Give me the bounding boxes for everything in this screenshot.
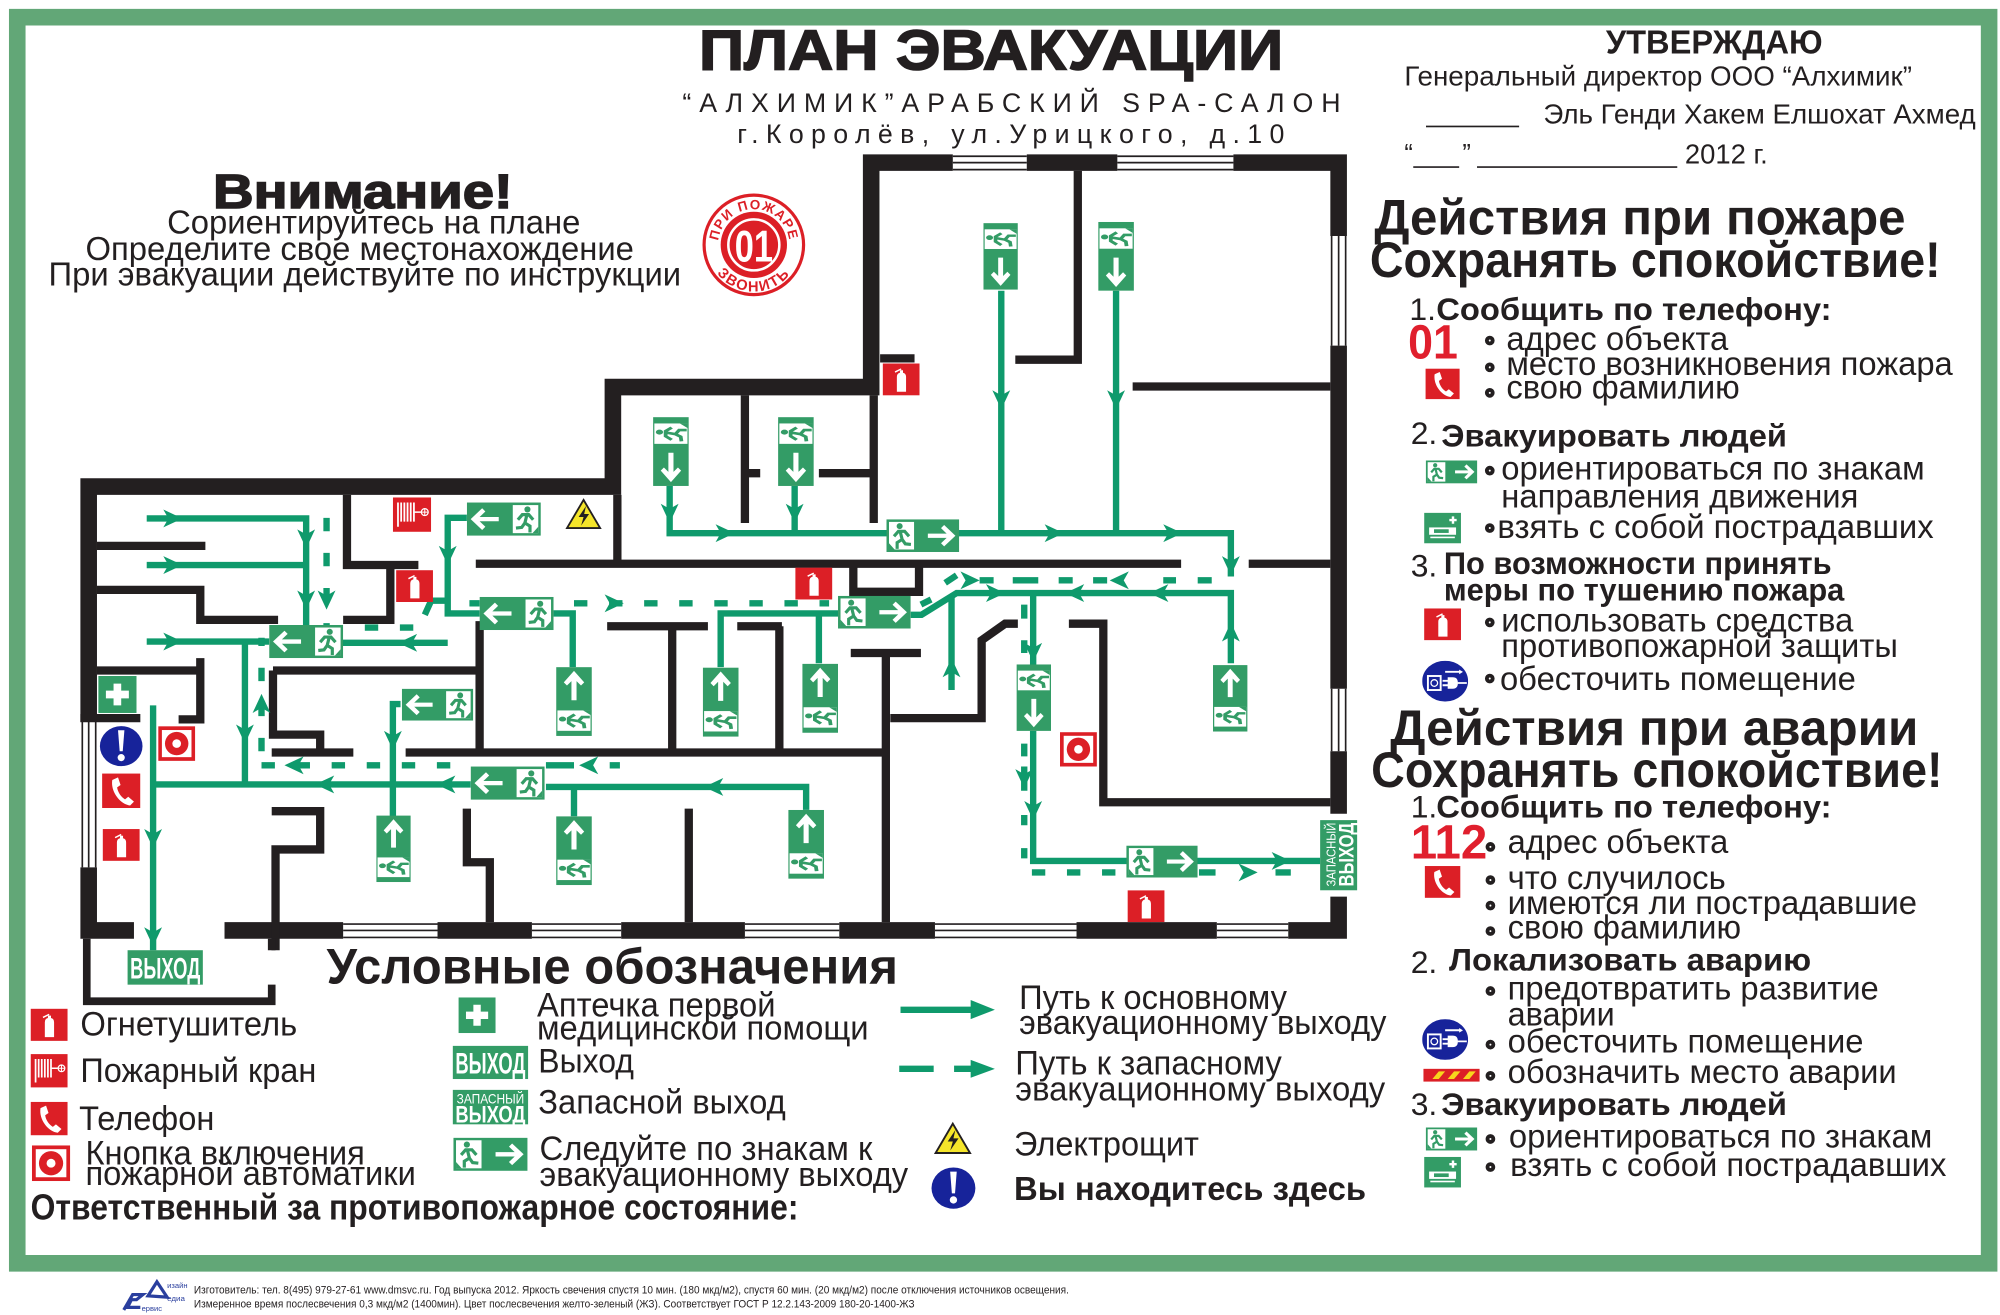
item: use fire equipment	[1487, 602, 1898, 665]
sign: up, right room	[1213, 665, 1247, 732]
approval block	[1404, 25, 1976, 169]
legend: phone label: Телефон	[79, 1100, 214, 1138]
sign: down, upper room 2	[1098, 222, 1134, 291]
fire heading: Действия при пожаре	[1374, 190, 1906, 246]
legend: exit label: Выход	[538, 1043, 634, 1081]
icon: extinguisher, west	[396, 570, 433, 602]
sign: down, small room 1	[653, 417, 689, 486]
item: surname: свою фамилию	[1508, 910, 1741, 947]
legend: electrical panel icon	[936, 1124, 970, 1153]
footer: maker logo: изайн	[167, 1281, 188, 1290]
sign: exit left, north-west	[269, 625, 343, 658]
icon: phone	[102, 774, 140, 808]
legend: you are here label: Вы находитесь здесь	[1014, 1171, 1366, 1208]
sign: main exit: ВЫХОД	[130, 952, 200, 985]
date quotes: “ ”	[1404, 140, 1471, 168]
item: take injured: взять с собой пострадавших	[1510, 1147, 1947, 1184]
sign: up, south room 2	[556, 816, 592, 885]
director name: Эль Генди Хакем Елшохат Ахмед	[1543, 99, 1976, 130]
legend: follow signs label: эвакуационному выходу	[540, 1156, 909, 1194]
legend: first aid label: Аптечка первой	[537, 987, 776, 1025]
route: central rooms	[342, 518, 838, 667]
step 2 heading: Локализовать аварию	[1449, 942, 1811, 978]
item: follow signs: ориентироваться по знакам	[1509, 1118, 1932, 1155]
route: right corridor to side exit	[911, 584, 1320, 870]
interior walls	[80, 171, 1330, 950]
legend: reserve route label: Путь к запасному	[1015, 1045, 1283, 1083]
stamp: call 01 in case of fire: 01	[735, 222, 773, 271]
legend: reserve route label: эвакуационному выходу	[1015, 1071, 1386, 1109]
item: surname: свою фамилию	[1506, 370, 1740, 407]
legend: main route label: эвакуационному выходу	[1019, 1004, 1387, 1042]
legend: reserve exit sign	[453, 1089, 528, 1128]
stretcher icon	[1424, 513, 1461, 543]
director position: Генеральный директор ООО “Алхимик”	[1404, 60, 1912, 91]
item: prevent	[1487, 970, 1879, 1033]
signature line	[1426, 126, 1519, 127]
legend: main route arrow	[901, 1000, 995, 1019]
sign: exit right, upper corridor	[886, 519, 959, 552]
attention line 2: Определите свое местонахождение	[85, 231, 634, 268]
step 2 heading: Эвакуировать людей	[1441, 417, 1787, 453]
sign: exit left, south corridor	[471, 767, 545, 800]
sign: down, small room 2	[778, 417, 814, 486]
route: upper rooms to corridor	[661, 291, 1240, 577]
extinguisher icon	[1424, 608, 1461, 640]
legend	[31, 938, 1387, 1227]
step 1 heading: 1.	[1411, 789, 1437, 825]
keep calm heading: Сохранять спокойствие!	[1371, 742, 1943, 798]
attention line 1: Сориентируйтесь на плане	[167, 204, 580, 241]
legend title: Условные обозначения	[327, 938, 898, 994]
item: cut power: обесточить помещение	[1508, 1023, 1863, 1060]
year: 2012 г.	[1685, 138, 1768, 169]
icon: electrical panel	[567, 500, 600, 528]
sign: up, south room 3	[788, 810, 824, 879]
legend: phone icon	[31, 1102, 68, 1135]
step 3 heading: Эвакуировать людей	[1441, 1086, 1787, 1122]
sign: up, room A	[556, 667, 592, 736]
item: injured: имеются ли пострадавшие	[1508, 885, 1917, 922]
item: mark location: обозначить место аварии	[1508, 1054, 1897, 1091]
item: use fire equipment: использовать средства	[1501, 602, 1854, 639]
icon: extinguisher, south	[1128, 890, 1164, 922]
legend: reserve route label	[1015, 1045, 1386, 1109]
arrow: branch up to corridor	[943, 597, 960, 690]
step 3 heading: 3.	[1411, 1086, 1437, 1122]
stretcher icon	[1424, 1157, 1461, 1187]
item: prevent: аварии	[1508, 996, 1615, 1033]
legend: alarm button label: Кнопка включения	[85, 1134, 365, 1172]
legend: first aid icon	[459, 997, 496, 1033]
legend: first aid label: медицинской помощи	[537, 1010, 869, 1048]
legend: main route label: Путь к основному	[1019, 979, 1288, 1017]
stamp: call 01 in case of fire: ЗВОНИТЬ	[718, 268, 788, 292]
phone icon	[1425, 866, 1460, 898]
title: ПЛАН ЭВАКУАЦИИ	[699, 19, 1283, 82]
sign: reserve exit	[1320, 820, 1358, 890]
legend: hose label: Пожарный кран	[80, 1052, 316, 1090]
attention heading: Внимание!	[213, 165, 513, 219]
item: follow signs: направления движения	[1501, 479, 1858, 516]
item: prevent: предотвратить развитие	[1508, 970, 1879, 1007]
item: address: адрес объекта	[1508, 824, 1729, 861]
floor plan	[80, 156, 1358, 1001]
step 3 heading: По возможности принять	[1444, 545, 1832, 581]
item: cut power: обесточить помещение	[1500, 661, 1856, 698]
step 2 heading: 2.	[1411, 944, 1437, 980]
keep calm heading: Сохранять спокойствие!	[1370, 232, 1941, 288]
sign: reserve exit: ВЫХОД	[1333, 822, 1358, 886]
legend: first aid label	[537, 987, 869, 1048]
stamp: call 01 in case of fire: ПРИ ПОЖАРЕ	[709, 200, 798, 240]
exterior walls	[80, 163, 1339, 939]
legend: follow signs label	[540, 1130, 909, 1194]
icon: you are here	[100, 726, 143, 766]
item: follow signs: ориентироваться по знакам	[1501, 451, 1925, 488]
sign: up, room B	[703, 668, 739, 737]
icon: extinguisher, upper block	[883, 364, 920, 395]
step 1 heading: Сообщить по телефону:	[1436, 291, 1832, 327]
step 3 heading	[1411, 545, 1845, 608]
step 3 heading: 3.	[1411, 548, 1437, 584]
header: title block	[682, 19, 1341, 149]
legend: exit sign: ВЫХОД	[455, 1047, 526, 1080]
icon: extinguisher, lower west	[103, 829, 140, 861]
approval heading: УТВЕРЖДАЮ	[1606, 25, 1823, 62]
sign: down, upper room 1	[983, 223, 1018, 290]
legend: exit sign	[453, 1046, 528, 1080]
sign: exit left, centre	[480, 597, 554, 630]
stamp: call 01 in case of fire	[702, 194, 806, 296]
route: south corridor to main exit	[144, 704, 806, 950]
legend: follow signs icon	[453, 1138, 527, 1171]
step 3 heading: меры по тушению пожара	[1444, 572, 1845, 608]
legend: reserve exit label: Запасной выход	[538, 1083, 786, 1121]
step 1 heading: 1.	[1409, 291, 1436, 327]
sign: exit right, central corridor	[838, 596, 911, 629]
icon: fire hose	[393, 497, 431, 532]
item: address: адрес объекта	[1506, 321, 1729, 358]
icon: extinguisher, corridor	[795, 568, 832, 599]
item: use fire equipment: противопожарной защиты	[1501, 628, 1898, 665]
legend: reserve exit sign: ВЫХОД	[455, 1101, 526, 1128]
date lines	[1413, 166, 1677, 168]
sign: exit right, towards side exit	[1126, 846, 1198, 878]
panel: actions in case of accident	[1371, 700, 1947, 1187]
phone icon	[1426, 369, 1460, 399]
item: follow signs	[1487, 451, 1925, 516]
sign: down, right corridor	[1017, 664, 1051, 731]
legend: you are here icon	[932, 1167, 975, 1209]
sign: exit left, near hose	[467, 503, 541, 536]
legend: reserve route arrow	[899, 1060, 995, 1078]
item: take injured: взять с собой пострадавших	[1497, 509, 1934, 546]
footer: maker logo: ервис	[142, 1304, 162, 1313]
attention line 3: При эвакуации действуйте по инструкции	[49, 257, 681, 294]
windows	[82, 156, 1346, 937]
footer: maker logo: едиа	[167, 1294, 186, 1303]
sign: up, south room 1	[376, 816, 411, 882]
exit sign icon	[1426, 460, 1477, 483]
legend: follow signs label: Следуйте по знакам к	[540, 1130, 873, 1168]
legend: alarm button label	[85, 1134, 416, 1193]
legend: hose icon	[31, 1054, 68, 1087]
subtitle: address: г.Королёв, ул.Урицкого, д.10	[737, 119, 1284, 149]
responsible person line: Ответственный за противопожарное состояние:	[31, 1187, 798, 1227]
subtitle: organisation: “АЛХИМИК”АРАБСКИЙ SPA-САЛОН	[682, 87, 1341, 118]
legend: extinguisher icon	[31, 1009, 68, 1041]
hazard stripes icon	[1423, 1069, 1480, 1082]
sign: reserve exit: ЗАПАСНЫЙ	[1323, 823, 1338, 886]
exit vestibule walls	[87, 939, 272, 1001]
icon: first aid	[98, 676, 137, 713]
accident heading: Действия при аварии	[1390, 700, 1918, 756]
legend: electrical panel label: Электрощит	[1014, 1126, 1199, 1164]
emergency number: 112	[1411, 815, 1487, 869]
legend: alarm button icon	[32, 1145, 70, 1181]
item: fire location: место возникновения пожара	[1506, 346, 1953, 383]
step 2 heading: 2.	[1411, 415, 1437, 451]
icon: fire alarm button, east	[1060, 732, 1097, 767]
footer: maker info: Изготовитель: тел. 8(495) 979-27-61 www.dmsvc.ru. Год выпуска 2012. Яркость свечения спустя 10 мин. (180 мкд/м2), спустя 60 мин. (20 мкд/м2) после отключения источников освещения.	[194, 1284, 1069, 1296]
panel: actions in case of fire	[1370, 190, 1953, 702]
legend: reserve exit sign: ЗАПАСНЫЙ	[457, 1089, 524, 1106]
footer: maker logo	[124, 1281, 188, 1313]
power off icon	[1422, 661, 1468, 702]
power off icon	[1422, 1019, 1468, 1060]
route: north-west rooms	[147, 510, 315, 784]
attention block	[49, 165, 681, 294]
legend: main route label	[1019, 979, 1387, 1042]
footer: maker info: Измеренное время послесвечения 0,3 мкд/м2 (1400мин). Цвет послесвечения желто-зеленый (ЖЗ). Соответствует ГОСТ Р 12.2.143-2009 180-20-1400-ЖЗ	[194, 1298, 915, 1310]
fire phone number: 01	[1408, 315, 1458, 369]
footer: maker info	[194, 1284, 1069, 1310]
legend: extinguisher label: Огнетушитель	[80, 1006, 297, 1044]
icon: fire alarm button, west	[158, 726, 195, 761]
sign: main exit	[128, 950, 203, 985]
sign: exit left, inner room	[402, 689, 473, 721]
item: what happened: что случилось	[1508, 860, 1726, 897]
exit sign icon	[1426, 1128, 1477, 1150]
sign: up, room C	[802, 664, 838, 733]
legend: alarm button label: пожарной автоматики	[85, 1155, 416, 1193]
dashed route: reserve exit paths	[253, 518, 1291, 881]
step 1 heading: Сообщить по телефону:	[1436, 789, 1832, 825]
